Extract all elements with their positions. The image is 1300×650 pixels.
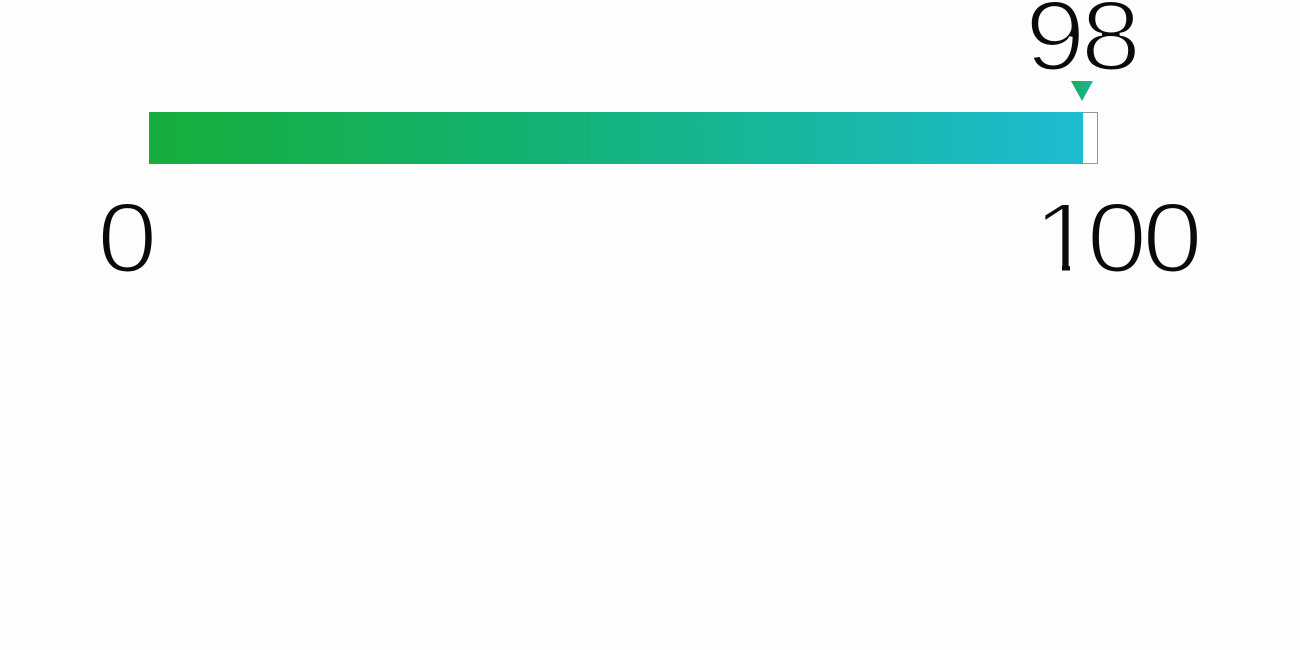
icon: value marker triangle [1071,81,1093,101]
gauge bar [149,112,1098,164]
gauge fill [149,112,1083,164]
scale maximum label: 100 [1033,182,1198,293]
scale minimum label: 0 [97,182,153,293]
